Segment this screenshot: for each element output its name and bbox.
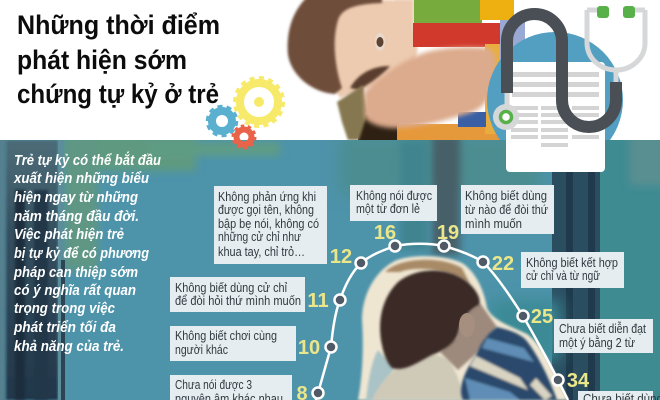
gray earpiece tubing: [587, 10, 645, 70]
callout: month 22: [521, 252, 624, 288]
shoulder behind: [366, 350, 395, 400]
callout: month 16: một từ đơn lẻ: [356, 201, 420, 216]
title: Những thời điểm: [17, 10, 220, 40]
callout: month 19: Không biết dùng: [465, 188, 547, 203]
callout: month 8: Chưa nói được 3: [175, 377, 252, 392]
document lines: [511, 72, 599, 147]
ear: [459, 313, 475, 337]
month numbers: 11: [307, 290, 329, 312]
red block: [413, 23, 503, 47]
intro text block: hiện ngay từ những: [14, 189, 138, 206]
yellow block: [480, 0, 514, 20]
month numbers: 25: [531, 306, 553, 328]
callout: month 19: từ nào để đòi thứ: [465, 202, 548, 217]
title: [17, 10, 220, 109]
callout: month 19: [461, 185, 554, 234]
photo backdrop: [395, 0, 414, 30]
intro text block: [13, 151, 161, 355]
callout: month 16: Không nói được: [356, 188, 432, 203]
ear and neck: [440, 303, 497, 370]
eye: [375, 33, 385, 51]
intro text block: Việc phát hiện trẻ: [14, 226, 124, 243]
callout: month 22: Không biết kết hợp: [526, 255, 618, 270]
callout: month 25: một ý bằng 2 từ: [559, 335, 635, 350]
intro text block: Trẻ tự kỷ có thể bắt đầu: [14, 151, 161, 169]
background photo: teal room: [0, 135, 660, 400]
sweater arm: [372, 354, 464, 400]
callout: month 25: [554, 319, 653, 353]
blue circle: [487, 32, 623, 140]
callout: month 10: người khác: [175, 342, 228, 357]
callout: month 10: [170, 326, 296, 361]
hair: [288, 0, 382, 94]
hair: [380, 270, 480, 369]
callout: month 12: những cử chỉ như: [218, 229, 301, 244]
sleeve: [337, 85, 368, 140]
month numbers: 34: [567, 370, 590, 392]
month numbers: 10: [298, 337, 320, 359]
intro text block: năm tháng đầu đời.: [14, 208, 139, 225]
callout: month 12: được gọi tên, không: [218, 202, 314, 217]
icon: stethoscope and document: [487, 6, 645, 172]
intro text block: trọng trong việc: [14, 300, 116, 317]
callout: month 11: Không biết dùng cử chỉ: [175, 280, 287, 295]
green block: [414, 0, 482, 23]
callout: month 12: khua tay, chỉ trỏ…: [218, 244, 305, 259]
illustration: child hiding face: [358, 256, 568, 400]
intro text block: phát triển tối đa: [13, 319, 116, 336]
title: phát hiện sớm: [17, 45, 187, 75]
document: [506, 62, 605, 172]
striped shirt: [461, 327, 557, 400]
yellow gear: [235, 78, 283, 126]
green ear tips: [597, 6, 609, 18]
callout: month 12: Không phản ứng khi: [218, 189, 316, 204]
callout: month 10: Không biết chơi cùng: [175, 328, 277, 343]
intro text block: bị tự kỷ để có phương: [14, 245, 149, 262]
callout: month 11: [170, 277, 305, 312]
month numbers: 16: [374, 222, 396, 244]
callout: month 22: cử chỉ và từ ngữ: [526, 268, 600, 283]
intro text block: khả năng của trẻ.: [14, 338, 124, 355]
intro text block: có ý nghĩa rất quan: [14, 282, 136, 299]
halo shading: [385, 260, 470, 284]
red gear: [233, 126, 255, 148]
dark shadow under arm: [358, 114, 400, 140]
title: chứng tự kỷ ở trẻ: [17, 79, 219, 109]
blue gear: [208, 106, 236, 136]
icon: gears: [208, 78, 283, 148]
lower blocks: [397, 124, 503, 140]
top photo: boy playing with blocks: [288, 0, 525, 140]
timeline nodes: [312, 240, 564, 398]
cream halo: [358, 256, 568, 400]
month numbers: 19: [437, 222, 459, 244]
intro text block: xuất hiện những biểu: [13, 170, 149, 187]
skin of face: [332, 0, 418, 98]
month numbers: 22: [492, 253, 514, 275]
month numbers: 12: [330, 246, 352, 268]
intro text block: pháp can thiệp sớm: [13, 264, 138, 281]
callout: month 11: để đòi hỏi thứ mình muốn: [175, 293, 301, 308]
callout: month 12: bập bẹ nói, không có: [218, 216, 319, 231]
callout: month 19: mình muốn: [465, 216, 522, 231]
timeline arc: [312, 240, 568, 400]
chest piece: [504, 93, 510, 106]
callout: month 16: [350, 185, 437, 221]
hand: [364, 47, 496, 128]
callout: month 12: [214, 186, 327, 264]
dark tube: [507, 14, 616, 127]
month numbers: [296, 222, 590, 400]
callout: month 8: [170, 375, 292, 400]
lower eye and brow: [350, 66, 390, 90]
